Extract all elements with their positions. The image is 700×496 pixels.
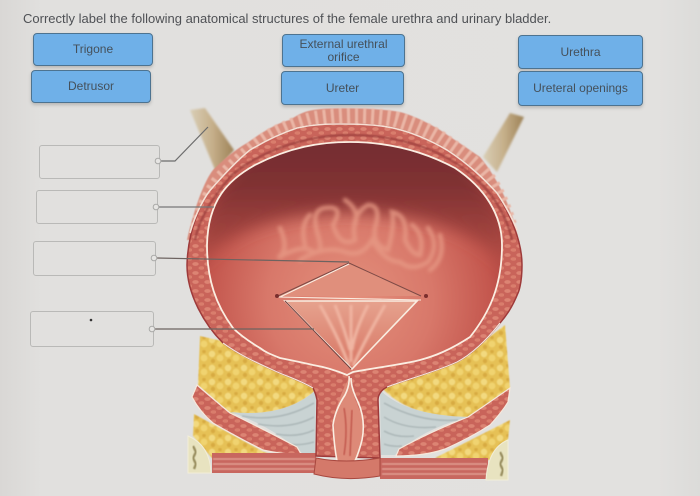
empty answer box 2	[36, 190, 158, 224]
empty answer box 3	[33, 241, 156, 276]
pelvic muscle strip: left	[192, 385, 301, 454]
pelvic floor muscle band	[212, 453, 488, 479]
ureter tube: right	[483, 113, 524, 172]
outer detrusor muscle dome	[187, 108, 518, 240]
empty answer box 1	[39, 145, 160, 179]
lumen dark upper shading	[208, 142, 501, 254]
label button: External urethral orifice	[282, 34, 405, 67]
label button: Ureter: Ureter	[326, 80, 359, 94]
label button: Ureter	[281, 71, 404, 105]
label button: Urethra: Urethra	[560, 44, 600, 58]
label button: Detrusor	[31, 70, 151, 103]
urethra	[333, 376, 363, 461]
leader line: trigone label	[154, 328, 314, 330]
fat tissue: left	[198, 336, 316, 414]
label button: External urethral orifice: orifice	[327, 50, 360, 64]
pubic bone: right	[486, 440, 508, 480]
label button: Urethra	[518, 35, 643, 69]
label button: Ureteral openings: Ureteral openings	[533, 81, 628, 95]
pelvic muscle strip: right	[396, 388, 510, 456]
leader line: ureter label	[159, 127, 208, 161]
label button: External urethral orifice: External urethral	[299, 36, 388, 50]
connective tissue: left	[230, 390, 316, 455]
leader line: wall label	[158, 206, 214, 208]
question heading: Correctly label the following anatomical structures of the female urethra and urinary bladder.	[23, 11, 551, 26]
label button: Ureteral openings	[518, 71, 643, 106]
bladder lumen	[206, 141, 503, 376]
pubic bone: left	[188, 436, 211, 473]
ureter tube: left	[190, 108, 234, 172]
fat tissue: right	[382, 325, 510, 417]
external urethral sphincter	[314, 458, 380, 479]
lumen outline	[207, 142, 502, 375]
fat tissue: lower left	[193, 414, 285, 458]
empty answer box 4	[30, 311, 154, 347]
fat tissue: lower right	[435, 420, 510, 460]
bladder anatomical illustration	[155, 107, 525, 480]
connective tissue: right	[380, 390, 468, 455]
bladder wall with urethra	[187, 124, 522, 458]
trigone triangle	[275, 263, 428, 369]
leader line: trigone apex label	[157, 258, 349, 262]
label button: Detrusor: Detrusor	[68, 79, 114, 93]
label button: Trigone	[33, 33, 153, 66]
lumen rugae folds	[278, 200, 442, 270]
label button: Trigone: Trigone	[73, 42, 113, 56]
